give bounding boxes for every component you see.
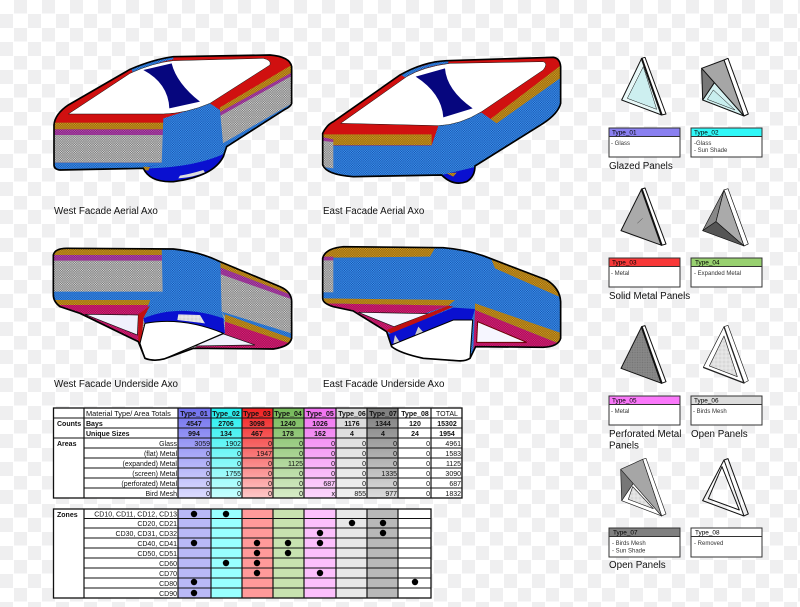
caption: east aerial: East Facade Aerial Axo: [323, 206, 425, 217]
table: material type and area totals: 687: [449, 481, 461, 488]
table: material type and area totals: 0: [237, 481, 241, 488]
table: material type and area totals: 855: [354, 491, 366, 498]
icon: type 05 perforated metal panel: [621, 326, 666, 383]
axo: east facade aerial: [320, 53, 567, 187]
table: material type and area totals: Type_08: [401, 411, 429, 418]
caption: west underside: West Facade Underside Axo: [54, 379, 179, 390]
table: material type and area totals: 3059: [194, 441, 210, 448]
table: material type and area totals: Type_05: [306, 411, 334, 418]
table: material type and area totals: 3098: [249, 421, 265, 428]
table: material type and area totals: 0: [426, 451, 430, 458]
table: zones matrix: CD70: [159, 571, 177, 578]
table: material type and area totals: 0: [331, 471, 335, 478]
table: material type and area totals: 0: [331, 451, 335, 458]
table: material type and area totals: (flat) Metal: [144, 451, 177, 458]
table: material type and area totals: Counts: [57, 421, 81, 428]
icon: type 06 bird mesh panel: [703, 325, 748, 383]
legend: type 06: [691, 396, 762, 425]
heading: solid metal panels: Solid Metal Panels: [609, 291, 690, 302]
table: zones matrix: Zones: [57, 512, 78, 519]
table: material type and area totals: 1335: [381, 471, 397, 478]
table: material type and area totals: Material Type/ Area Totals: [86, 409, 171, 418]
legend: type 03: [609, 258, 680, 287]
heading: perforated metal panels: Perforated Metal: [609, 429, 681, 440]
legend: type 07: [609, 528, 680, 557]
table: zones matrix: CD20, CD21: [137, 521, 177, 528]
table: material type and area totals: 0: [206, 491, 210, 498]
heading: perforated metal panels: Panels: [609, 440, 639, 452]
legend: type 08: [691, 528, 762, 557]
legend: type 04: - Expanded Metal: [694, 271, 741, 277]
table: material type and area totals: Type_06: [338, 411, 366, 418]
table: material type and area totals: 0: [393, 441, 397, 448]
legend: type 06: - Birds Mesh: [693, 409, 727, 415]
legend: type 04: [691, 258, 762, 287]
table: material type and area totals: 3090: [445, 471, 461, 478]
heading: glazed panels: Glazed Panels: [609, 161, 673, 172]
table: material type and area totals: 15302: [437, 421, 457, 428]
legend: type 01: - Glass: [611, 141, 630, 147]
table: zones matrix: CD10, CD11, CD12, CD13: [94, 512, 177, 518]
table: material type and area totals: [54, 408, 462, 498]
table: material type and area totals: 0: [393, 451, 397, 458]
table: material type and area totals: Type_04: [274, 411, 302, 418]
legend: type 07: - Sun Shade: [612, 548, 646, 554]
table: material type and area totals: 134: [220, 431, 232, 438]
legend: type 04: Type_04: [695, 260, 720, 266]
table: material type and area totals: 0: [237, 491, 241, 498]
caption: east underside: East Facade Underside Axo: [323, 379, 445, 390]
legend: type 07: Type_07: [613, 530, 638, 536]
table: material type and area totals: 0: [426, 491, 430, 498]
table: material type and area totals: 1176: [344, 421, 360, 428]
table: material type and area totals: 977: [385, 491, 397, 498]
table: material type and area totals: 0: [393, 481, 397, 488]
heading: open panels type 07: Open Panels: [609, 560, 666, 571]
table: material type and area totals: 1832: [445, 491, 461, 498]
table: material type and area totals: 4: [381, 431, 385, 438]
legend: type 05: [609, 396, 680, 425]
legend: type 02: -Glass: [694, 141, 711, 147]
table: material type and area totals: 0: [362, 471, 366, 478]
table: material type and area totals: 1125: [288, 461, 303, 468]
table: material type and area totals: Type_02: [212, 411, 240, 418]
legend: type 02: - Sun Shade: [694, 148, 728, 154]
table: material type and area totals: 4547: [186, 421, 202, 428]
table: material type and area totals: 0: [426, 471, 430, 478]
table: material type and area totals: Bays: [86, 421, 103, 428]
table: material type and area totals: 1954: [439, 431, 455, 438]
table: material type and area totals: 162: [314, 431, 326, 438]
table: material type and area totals: 0: [237, 451, 241, 458]
table: material type and area totals: 0: [299, 481, 303, 488]
table: material type and area totals: 0: [206, 481, 210, 488]
table: material type and area totals: 1125: [446, 461, 461, 468]
table: material type and area totals: 0: [426, 461, 430, 468]
table: zones matrix: CD60: [159, 561, 177, 568]
icon: type 01 glass panel: [622, 57, 666, 115]
table: material type and area totals: 467: [251, 431, 263, 438]
legend: type 05: Type_05: [612, 398, 637, 404]
table: material type and area totals: Type_01: [180, 411, 208, 418]
legend: type 03: Type_03: [612, 260, 637, 266]
table: material type and area totals: 4961: [445, 441, 461, 448]
table: material type and area totals: Bird Mesh: [145, 491, 177, 498]
table: material type and area totals: 0: [331, 441, 335, 448]
table: material type and area totals: Glass: [159, 441, 177, 448]
table: zones matrix: CD40, CD41: [137, 541, 177, 548]
table: material type and area totals: 120: [409, 421, 421, 428]
table: material type and area totals: 687: [323, 481, 335, 488]
table: material type and area totals: 0: [237, 461, 241, 468]
table: material type and area totals: 0: [299, 451, 303, 458]
table: material type and area totals: 2706: [218, 421, 234, 428]
table: material type and area totals: (expanded) Metal: [123, 461, 177, 468]
table: material type and area totals: 0: [299, 441, 303, 448]
table: material type and area totals: 1240: [280, 421, 296, 428]
table: material type and area totals: 0: [426, 441, 430, 448]
table: material type and area totals: 0: [426, 481, 430, 488]
table: material type and area totals: 1344: [375, 421, 391, 428]
table: material type and area totals: 0: [331, 461, 335, 468]
legend: type 07: - Birds Mesh: [612, 541, 646, 547]
table: material type and area totals: (perforated) Metal: [121, 481, 177, 488]
legend: type 06: Type_06: [694, 398, 719, 404]
caption: west aerial: West Facade Aerial Axo: [54, 206, 158, 217]
legend: type 02: [691, 128, 762, 157]
icon: type 04 expanded metal panel: [703, 189, 748, 246]
legend: type 08: Type_08: [695, 530, 720, 536]
table: material type and area totals: 0: [299, 491, 303, 498]
icon: type 02 glass with sun shade: [702, 58, 748, 116]
table: material type and area totals: 24: [411, 431, 419, 438]
table: material type and area totals: 0: [268, 491, 272, 498]
table: material type and area totals: 4: [350, 431, 354, 438]
table: material type and area totals: 0: [299, 471, 303, 478]
table: material type and area totals: (screen) Metal: [132, 471, 177, 478]
table: material type and area totals: 178: [282, 431, 294, 438]
table: zones matrix: CD90: [159, 591, 177, 598]
icon: type 08 removed panel: [703, 459, 748, 516]
axo: east facade underside: [320, 245, 567, 365]
table: material type and area totals: 1026: [312, 421, 328, 428]
table: zones matrix: [54, 509, 431, 598]
table: material type and area totals: Unique Sizes: [86, 431, 130, 438]
table: material type and area totals: 0: [268, 461, 272, 468]
table: material type and area totals: x: [332, 491, 336, 498]
table: material type and area totals: 1583: [445, 451, 461, 458]
table: zones matrix: CD50, CD51: [137, 551, 177, 558]
table: material type and area totals: 0: [362, 461, 366, 468]
icon: type 07 mesh with sun shade: [621, 458, 666, 516]
legend: type 08: - Removed: [694, 541, 723, 547]
table: material type and area totals: 994: [188, 431, 200, 438]
axo: west facade underside: [50, 245, 297, 365]
table: zones matrix: CD80: [159, 581, 177, 588]
table: zones matrix: CD30, CD31, CD32: [116, 531, 177, 538]
legend: type 01: Type_01: [612, 130, 637, 136]
table: material type and area totals: 0: [206, 471, 210, 478]
table: material type and area totals: Areas: [57, 441, 77, 448]
table: material type and area totals: 0: [268, 471, 272, 478]
table: material type and area totals: 1902: [225, 441, 241, 448]
table: material type and area totals: 0: [206, 451, 210, 458]
table: material type and area totals: Type_07: [369, 411, 397, 418]
legend: type 05: - Metal: [611, 409, 629, 415]
table: material type and area totals: 0: [362, 441, 366, 448]
axo: west facade aerial: [50, 53, 297, 187]
table: material type and area totals: Type_03: [243, 411, 271, 418]
table: material type and area totals: 0: [362, 481, 366, 488]
legend: type 03: - Metal: [611, 271, 629, 277]
table: material type and area totals: 0: [206, 461, 210, 468]
table: material type and area totals: 0: [268, 481, 272, 488]
table: material type and area totals: TOTAL: [436, 411, 458, 418]
table: material type and area totals: 1947: [256, 451, 272, 458]
table: material type and area totals: 0: [362, 451, 366, 458]
table: material type and area totals: 0: [393, 461, 397, 468]
legend: type 02: Type_02: [694, 130, 719, 136]
legend: type 01: [609, 128, 680, 157]
table: material type and area totals: 0: [268, 441, 272, 448]
icon: type 03 solid metal panel: [621, 188, 666, 245]
table: material type and area totals: 1755: [225, 471, 241, 478]
heading: open panels type 06: Open Panels: [691, 429, 748, 440]
